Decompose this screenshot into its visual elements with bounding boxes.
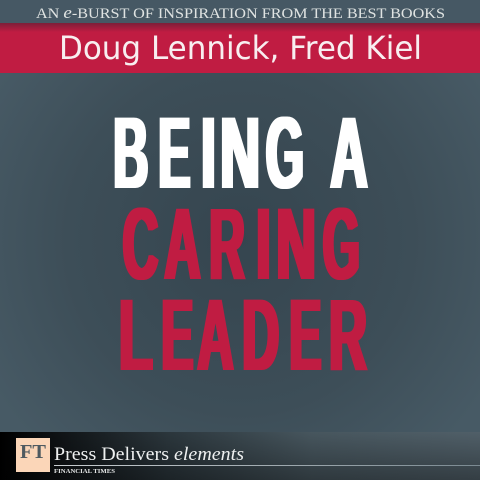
author band: [0, 23, 480, 73]
title line: caring: N: [276, 188, 316, 301]
authors: Doug Lennick, Fred Kiel: [59, 29, 422, 67]
title line: caring: R: [209, 187, 245, 301]
top strip: [0, 0, 480, 23]
title line: being a: E: [158, 96, 190, 210]
title line: caring: C: [123, 187, 158, 301]
title line: being a: G: [266, 96, 304, 210]
title line: leader: R: [329, 279, 367, 393]
title line: being a: I: [201, 97, 216, 211]
title line: leader: D: [242, 279, 279, 393]
tagline: AN e-BURST OF INSPIRATION FROM THE BEST BOOKS: [36, 3, 445, 22]
title line: leader: L: [119, 279, 153, 392]
financial times: FINANCIAL TIMES: [54, 469, 116, 475]
footer band: [0, 432, 480, 480]
title line: being a: A: [330, 97, 368, 211]
title line: caring: A: [164, 188, 201, 302]
imprint name: Press Delivers elements: [54, 445, 244, 465]
title line: being a: [114, 96, 368, 211]
icon: FT logo: [16, 438, 50, 472]
title line: being a: B: [114, 96, 148, 210]
title line: caring: G: [323, 187, 360, 301]
title line: leader: E: [290, 278, 321, 392]
title line: leader: A: [198, 279, 234, 393]
title line: leader: [119, 278, 367, 393]
title line: caring: [123, 187, 360, 302]
title: [114, 96, 368, 393]
title line: leader: E: [162, 278, 193, 392]
title line: being a: N: [220, 97, 260, 210]
title line: caring: I: [256, 188, 271, 302]
icon: FT logo: FT: [20, 441, 47, 463]
